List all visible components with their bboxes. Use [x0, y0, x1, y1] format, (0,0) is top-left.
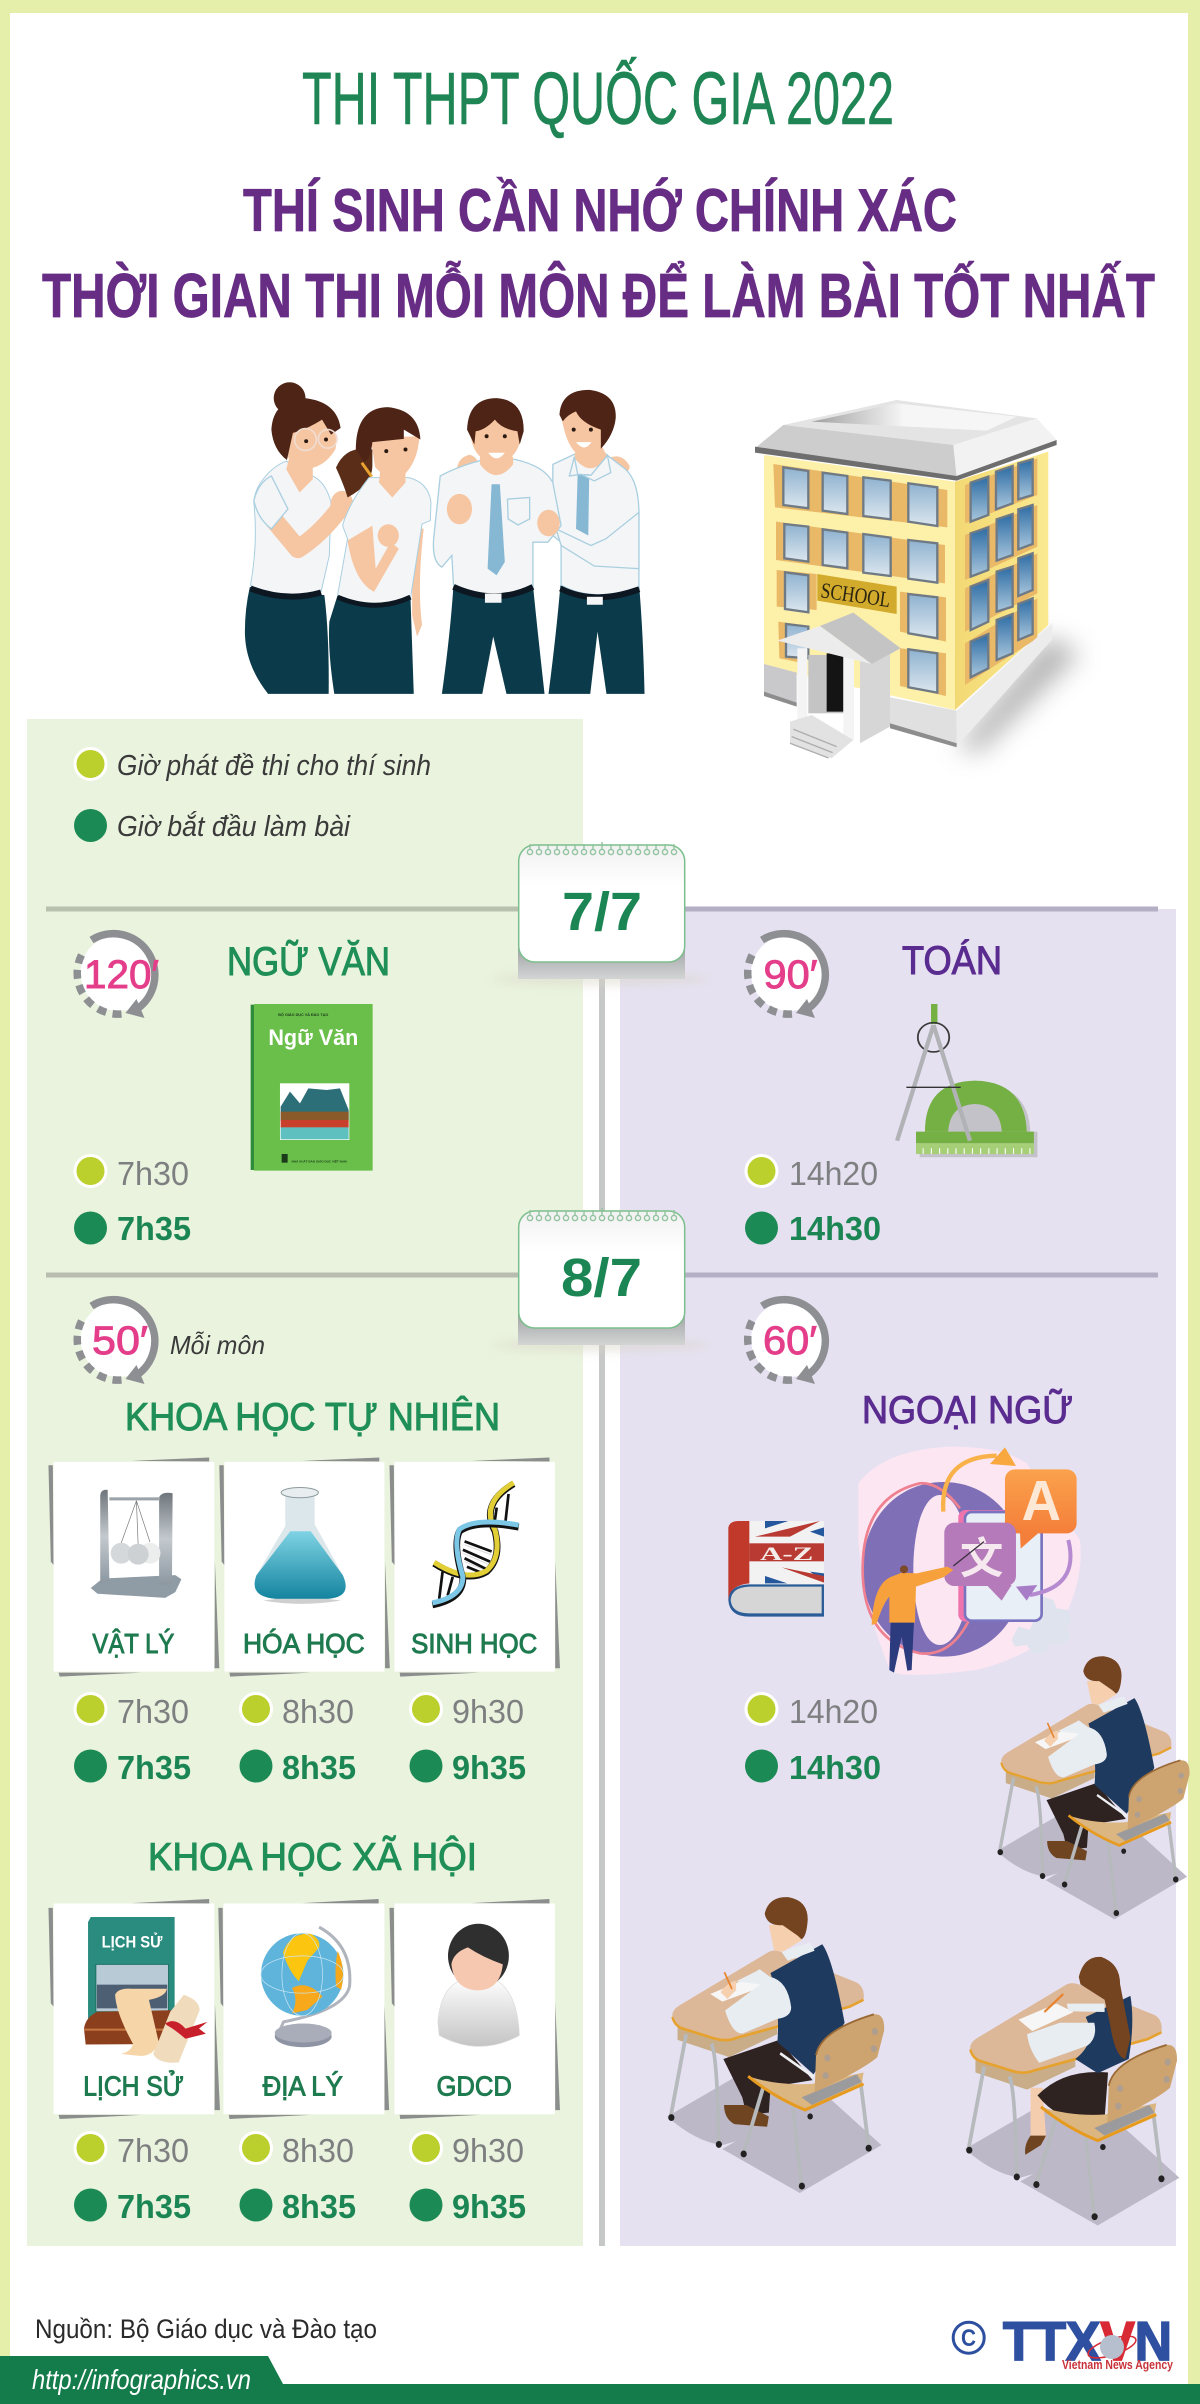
- card: geography: [223, 1903, 384, 2114]
- icon: dictionary and translation: [728, 1447, 1081, 1675]
- times: natural sciences: 7h35: [117, 1749, 191, 1786]
- calendar 7/7: 7/7: [562, 882, 642, 942]
- student 3: [433, 398, 561, 694]
- centre vertical divider: [599, 975, 605, 2246]
- times: social sciences: 8h30: [282, 2132, 354, 2169]
- icon: English dictionary: [728, 1521, 824, 1617]
- illustration: students at desks: [667, 1656, 1190, 2226]
- icon: textbook: Ngữ Văn: [268, 1025, 358, 1050]
- times: social sciences: 9h35: [452, 2188, 526, 2225]
- illustration: four students: [245, 382, 645, 694]
- source note: Nguồn: Bộ Giáo dục và Đào tạo: [35, 2314, 377, 2344]
- student at desk: top right: [997, 1656, 1190, 1919]
- logo: TTXVN: TTXVN: [1003, 2310, 1172, 2372]
- card: chemistry: HÓA HỌC: [243, 1628, 365, 1659]
- card: physics: [54, 1462, 214, 1672]
- heading: NGOẠI NGỮ: [862, 1388, 1073, 1432]
- note: each subject: Mỗi môn: [170, 1330, 265, 1360]
- timer 60: [748, 1300, 827, 1384]
- heading: natural sciences: KHOA HỌC TỰ NHIÊN: [125, 1396, 500, 1439]
- times: 14h30: [789, 1749, 881, 1786]
- subject: Ngữ Văn: [74, 934, 390, 1247]
- times: 14h20: [789, 1155, 878, 1192]
- icon: English dictionary: A-Z: [760, 1544, 813, 1565]
- title line 2: THÍ SINH CẦN NHỚ CHÍNH XÁC: [243, 177, 957, 244]
- timer 120: [77, 934, 159, 1018]
- timer 120: 120′: [84, 953, 159, 997]
- times: social sciences: [74, 2132, 526, 2225]
- times: natural sciences: 8h30: [282, 1693, 354, 1730]
- card: biology: SINH HỌC: [411, 1628, 537, 1659]
- bubble: letter A: [1005, 1469, 1077, 1549]
- student at desk: girl, bottom right: [965, 1957, 1179, 2226]
- timer 60: 60′: [763, 1319, 817, 1363]
- times: natural sciences: 8h35: [282, 1749, 356, 1786]
- student at desk: bottom left: [667, 1897, 884, 2193]
- timer 50 minutes: 50′: [92, 1319, 148, 1363]
- school sign: SCHOOL: [819, 578, 892, 612]
- student 1: [245, 382, 353, 694]
- icon: textbook: BỘ GIÁO DỤC VÀ ĐÀO TẠO: [278, 1012, 328, 1017]
- bubble: CJK character: [944, 1523, 1016, 1601]
- card: history: LỊCH SỬ: [102, 1932, 163, 1951]
- subject: Ngoại ngữ: [728, 1300, 1081, 1786]
- legend: light dot: [75, 748, 106, 780]
- logo: TTXVN: Vietnam News Agency: [1062, 2357, 1174, 2372]
- times: [745, 1693, 881, 1786]
- title line 1: THI THPT QUỐC GIA 2022: [302, 57, 894, 140]
- calendar 8/7: 8/7: [561, 1248, 642, 1308]
- heading: TOÁN: [902, 938, 1002, 983]
- times: social sciences: 9h30: [452, 2132, 524, 2169]
- bubble: letter A: A: [1022, 1470, 1061, 1533]
- footer url: http://infographics.vn: [32, 2364, 251, 2395]
- times: natural sciences: [74, 1693, 526, 1786]
- heading: NGỮ VĂN: [227, 939, 390, 984]
- times: social sciences: 7h30: [117, 2132, 189, 2169]
- card: chemistry: [224, 1462, 384, 1672]
- calendar 8/7: [492, 1208, 712, 1351]
- student 2: [329, 407, 431, 694]
- times: 7h35: [117, 1210, 191, 1247]
- legend: dark dot: [74, 809, 107, 842]
- times: 7h30: [117, 1155, 189, 1192]
- panel: green left column: [27, 719, 583, 2246]
- times: 14h30: [789, 1210, 881, 1247]
- icon: translation illustration: [858, 1447, 1081, 1675]
- card: civics: [395, 1903, 555, 2114]
- student 4: [549, 390, 645, 694]
- icon: textbook: NHÀ XUẤT BẢN GIÁO DỤC VIỆT NAM: [292, 1159, 347, 1164]
- times: natural sciences: 7h30: [117, 1693, 189, 1730]
- card: geography: ĐỊA LÝ: [263, 2071, 343, 2102]
- timer 90: 90′: [764, 953, 818, 997]
- footer bar: [0, 2356, 1200, 2404]
- heading: social sciences: KHOA HỌC XÃ HỘI: [148, 1835, 477, 1879]
- bubble: CJK character: 文: [960, 1524, 1003, 1586]
- timer 90: [748, 934, 827, 1018]
- times: natural sciences: 9h35: [452, 1749, 526, 1786]
- calendar 7/7: [492, 842, 712, 985]
- times: [74, 1155, 191, 1247]
- divider lines for dates: [46, 906, 1158, 1278]
- times: social sciences: 7h35: [117, 2188, 191, 2225]
- logo: TTXVN: C: [961, 2325, 976, 2352]
- legend: distribution time text: Giờ phát đề thi cho thí sinh: [117, 750, 431, 782]
- illustration: school building: [755, 400, 1080, 758]
- cards: natural sciences: [48, 1457, 560, 1677]
- title: [42, 57, 1155, 331]
- card: history: LỊCH SỬ: [83, 2070, 184, 2102]
- times: social sciences: 8h35: [282, 2188, 356, 2225]
- card: biology: [395, 1462, 555, 1672]
- card: history: [54, 1903, 214, 2114]
- panel: purple right column: [620, 909, 1176, 2246]
- cards: social sciences: [48, 1899, 560, 2119]
- icon: compass and protractor: [897, 1004, 1037, 1157]
- icon: textbook: [251, 1004, 373, 1171]
- times: [745, 1155, 881, 1247]
- legend: [74, 748, 431, 843]
- card: physics: VẬT LÝ: [92, 1628, 174, 1659]
- times: natural sciences: 9h30: [452, 1693, 524, 1730]
- legend: start time text: Giờ bắt đầu làm bài: [117, 810, 351, 843]
- times: 14h20: [789, 1693, 878, 1730]
- card: civics: GDCD: [436, 2071, 512, 2102]
- subject: Toán: [745, 934, 1037, 1247]
- timer 50 minutes: [77, 1300, 156, 1384]
